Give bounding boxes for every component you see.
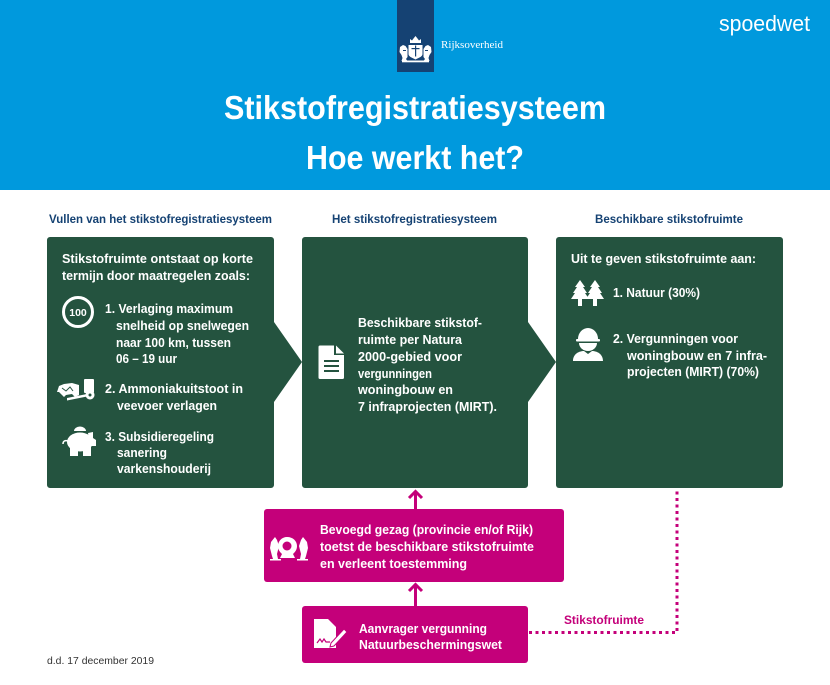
system description text — [357, 316, 497, 414]
aanvrager text — [359, 622, 503, 652]
column heading: beschikbaar: Beschikbare stikstofruimte — [595, 212, 743, 226]
measure 1 text — [105, 302, 249, 366]
arrow: gezag to systeem — [409, 492, 422, 509]
measure 1 text: 06 – 19 uur — [116, 352, 177, 366]
title: Stikstofregistratiesysteem — [224, 89, 606, 126]
measure 1 text: 1. Verlaging maximum — [105, 302, 233, 316]
icon: cow and feed — [57, 379, 94, 400]
gezag text — [320, 523, 534, 571]
icon: trees — [571, 280, 604, 306]
measure 3 text: varkenshouderij — [117, 462, 211, 476]
item 2 text: projecten (MIRT) (70%) — [627, 365, 759, 379]
measure 2 text: veevoer verlagen — [117, 399, 217, 413]
system description text: 7 infraprojecten (MIRT). — [358, 400, 497, 414]
gezag text: Bevoegd gezag (provincie en/of Rijk) — [320, 523, 533, 537]
system description text: 2000-gebied voor — [358, 350, 462, 364]
icon: signed document — [314, 619, 347, 648]
aanvrager text: Aanvrager vergunning — [359, 622, 487, 636]
item 1 text: 1. Natuur (30%) — [613, 286, 700, 300]
measure 3 text — [105, 430, 214, 476]
logo: Rijksoverheid — [397, 0, 504, 72]
column heading: systeem: Het stikstofregistratiesysteem — [332, 212, 497, 226]
panel: vullen van het systeem — [47, 237, 302, 488]
title — [224, 89, 606, 176]
system description text: ruimte per Natura — [358, 333, 463, 347]
measure 2 text — [105, 382, 243, 413]
icon: speed limit 100 — [64, 298, 92, 326]
icon: crest — [270, 537, 308, 560]
icon: document — [318, 346, 344, 379]
system description text: vergunningen — [358, 367, 432, 381]
dotted connector: stikstofruimte — [529, 490, 677, 632]
item 2 text: woningbouw en 7 infra- — [626, 349, 767, 363]
arrow: aanvrager to gezag — [409, 584, 422, 606]
panel: beschikbare stikstofruimte — [556, 237, 783, 488]
panel: aanvrager — [302, 606, 528, 663]
gezag text: en verleent toestemming — [320, 557, 467, 571]
item 2 text — [613, 332, 767, 379]
measure 2 text: 2. Ammoniakuitstoot in — [105, 382, 243, 396]
panel: het systeem — [302, 237, 556, 488]
system description text: woningbouw en — [357, 383, 453, 397]
measure 1 text: snelheid op snelwegen — [116, 319, 249, 333]
system description text: Beschikbare stikstof- — [358, 316, 482, 330]
icon: construction worker — [573, 328, 603, 361]
panel intro text — [62, 252, 253, 283]
measure 1 text: naar 100 km, tussen — [116, 336, 231, 350]
header band — [0, 0, 830, 190]
date note: d.d. 17 december 2019 — [47, 655, 154, 667]
panel intro text: Stikstofruimte ontstaat op korte — [62, 252, 253, 266]
gezag text: toetst de beschikbare stikstofruimte — [320, 540, 534, 554]
panel intro text: termijn door maatregelen zoals: — [62, 269, 250, 283]
panel intro: Uit te geven stikstofruimte aan: — [571, 252, 756, 266]
panel: bevoegd gezag — [264, 509, 564, 582]
icon: speed limit 100: 100 — [69, 307, 87, 319]
item 2 text: 2. Vergunningen voor — [613, 332, 738, 346]
column heading: vullen: Vullen van het stikstofregistratiesysteem — [49, 212, 272, 226]
icon: piggy bank — [63, 426, 96, 456]
logo wordmark: Rijksoverheid — [441, 40, 504, 51]
title: Hoe werkt het? — [306, 139, 524, 176]
aanvrager text: Natuurbeschermingswet — [359, 638, 503, 652]
spoedwet label: spoedwet — [719, 11, 810, 36]
measure 3 text: sanering — [117, 446, 167, 460]
measure 3 text: 3. Subsidieregeling — [105, 430, 214, 444]
connector label: Stikstofruimte — [564, 613, 644, 627]
